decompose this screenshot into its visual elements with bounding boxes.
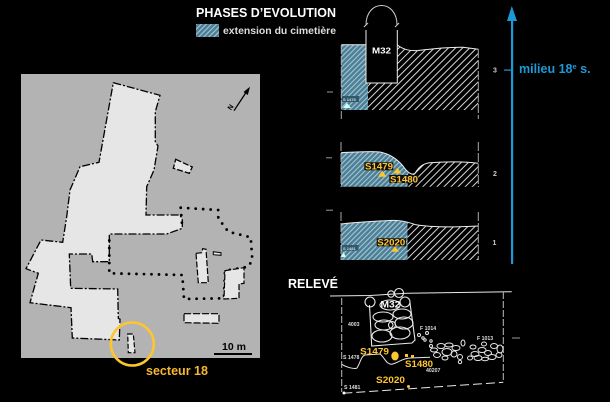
survey drawing bbox=[330, 288, 512, 393]
scale bar: 10 m bbox=[222, 341, 246, 353]
timeline arrow bbox=[504, 6, 517, 264]
heading: releve: RELEVÉ bbox=[288, 276, 338, 291]
survey labels: 4003 bbox=[348, 322, 360, 328]
survey labels: F 1014 bbox=[420, 326, 436, 332]
section profile bbox=[342, 354, 430, 368]
small tag S 1481: S 1481 bbox=[343, 246, 356, 251]
yellow survey labels: S2020 bbox=[376, 375, 405, 385]
rubble F 1013 bbox=[468, 342, 503, 361]
north arrow: N bbox=[227, 104, 236, 112]
rubble F 1014 bbox=[418, 332, 465, 364]
small building north bbox=[173, 159, 192, 173]
survey labels: S 1478 bbox=[343, 355, 360, 361]
north arrow bbox=[227, 87, 250, 112]
marker S1480: S1480 bbox=[390, 174, 418, 184]
number 1: 1 bbox=[492, 240, 496, 247]
wall M32 stones bbox=[365, 288, 415, 346]
heading: phases: PHASES D’EVOLUTION bbox=[196, 6, 336, 20]
survey labels: F 1013 bbox=[477, 336, 493, 342]
tick 2 bbox=[326, 157, 332, 158]
label: milieu 18e s.: s. bbox=[577, 62, 591, 76]
section: phase 2 bbox=[341, 142, 478, 187]
survey labels bbox=[343, 322, 493, 391]
building centre bbox=[196, 249, 208, 283]
main excavated area bbox=[26, 83, 182, 340]
survey labels: S 1481 bbox=[344, 385, 361, 391]
survey M32 label: M32 bbox=[380, 300, 400, 310]
number 3: 3 bbox=[493, 68, 497, 74]
yellow survey labels bbox=[342, 346, 433, 394]
sector 18 highlight circle bbox=[111, 322, 154, 366]
marker S1479: S1479 bbox=[365, 162, 393, 172]
tick releve bbox=[512, 338, 520, 339]
building south bbox=[184, 314, 219, 323]
tick 1 bbox=[326, 210, 333, 211]
small tag S 1478: S 1478 bbox=[343, 97, 356, 102]
tick 3 bbox=[327, 92, 333, 93]
survey labels: 40207 bbox=[426, 368, 441, 374]
sector 18 building bbox=[128, 334, 135, 353]
section: phase 3 bbox=[341, 6, 478, 119]
number 2: 2 bbox=[493, 171, 497, 178]
small block bbox=[213, 252, 221, 255]
marker S2020: S2020 bbox=[377, 238, 405, 248]
label: milieu 18e s.: milieu 18 bbox=[519, 62, 572, 76]
yellow survey labels: S1480 bbox=[405, 359, 433, 369]
panel: site plan map bbox=[21, 74, 260, 358]
section: phase 1 bbox=[341, 212, 478, 260]
scale bar bbox=[214, 341, 252, 355]
wall M32: M32 bbox=[372, 46, 391, 56]
yellow survey labels: S1479 bbox=[360, 346, 389, 356]
label: milieu 18e s.: e bbox=[572, 62, 577, 71]
label: secteur 18: secteur 18 bbox=[146, 364, 208, 378]
legend: extension du cimetière bbox=[223, 25, 336, 37]
dotted enclosure bbox=[109, 208, 252, 299]
building east bbox=[224, 268, 244, 299]
